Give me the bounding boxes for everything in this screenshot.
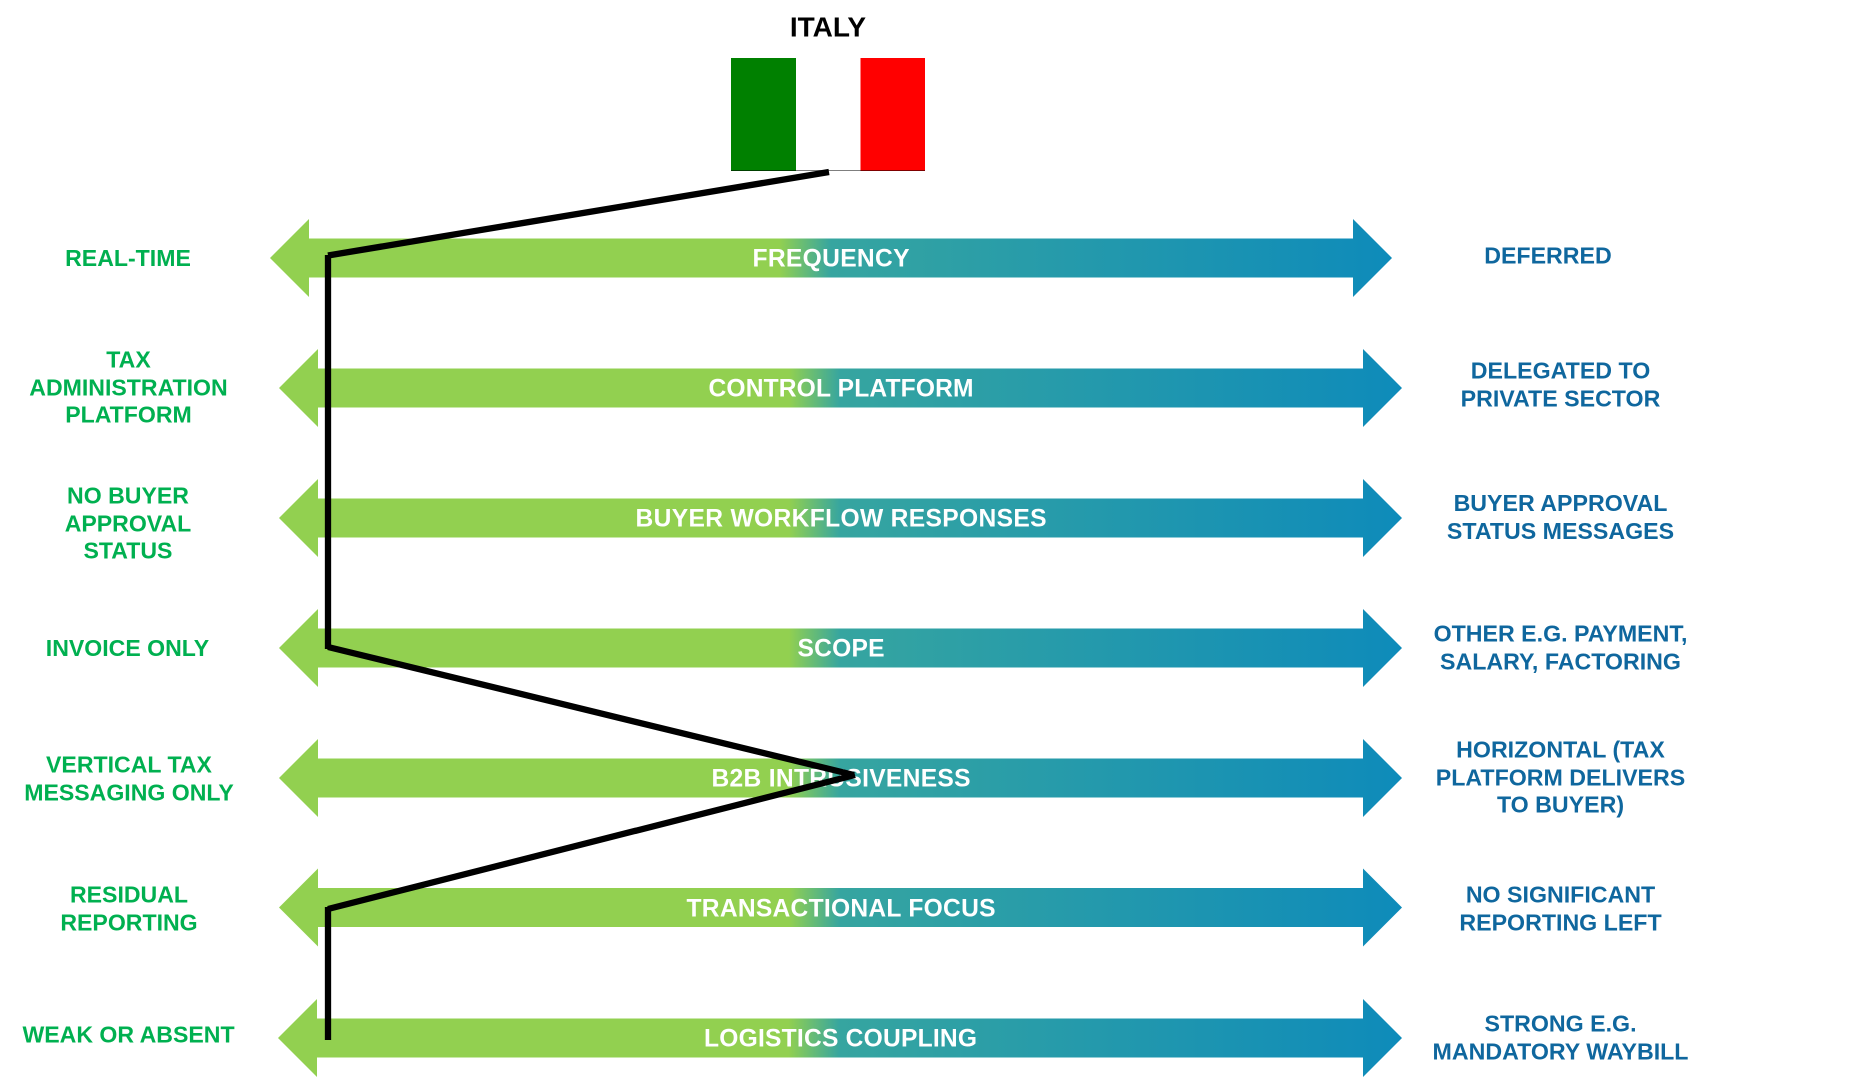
label: delegated to private sector: DELEGATED TO [1471,358,1650,384]
row: logistics coupling [22,999,1688,1077]
row: frequency [65,219,1612,297]
label: buyer approval status messages: STATUS MESSAGES [1447,518,1674,544]
heading: buyer workflow responses: BUYER WORKFLOW RESPONSES [636,506,1046,533]
title: Italy: ITALY [790,12,866,42]
label: tax administration platform: ADMINISTRATION [29,375,228,401]
heading: frequency: FREQUENCY [752,246,910,273]
label: no buyer approval status: NO BUYER [67,482,189,508]
label: horizontal: PLATFORM DELIVERS [1436,764,1685,790]
label: vertical tax messaging only: MESSAGING ONLY [24,780,234,806]
label: no significant reporting left: NO SIGNIFICANT [1466,882,1655,908]
heading: control platform: CONTROL PLATFORM [708,376,974,403]
label: horizontal: TO BUYER) [1497,792,1624,818]
label: tax administration platform: TAX [106,347,151,373]
label: strong e.g. mandatory waybill: STRONG E.G. [1484,1011,1637,1037]
row: transactional focus [60,868,1662,946]
arrow: control platform scale [279,349,1402,427]
label: other e.g. payment, salary, factoring: SALARY, FACTORING [1440,648,1681,674]
label: vertical tax messaging only: VERTICAL TAX [46,752,212,778]
arrow: frequency scale [270,219,1392,297]
heading: b2b intrusiveness: B2B INTRUSIVENESS [712,766,970,793]
arrow: buyer workflow scale [279,479,1402,557]
label: residual reporting: REPORTING [60,910,198,936]
label: residual reporting: RESIDUAL [70,882,188,908]
label: no buyer approval status: STATUS [84,538,172,564]
label: horizontal: HORIZONTAL (TAX [1456,737,1665,763]
arrow: logistics coupling scale [278,999,1402,1077]
label: other e.g. payment, salary, factoring: OTHER E.G. PAYMENT, [1434,621,1687,647]
label: weak or absent: WEAK OR ABSENT [22,1022,235,1048]
label: delegated to private sector: PRIVATE SECTOR [1461,386,1661,412]
heading: transactional focus: TRANSACTIONAL FOCUS [686,895,996,922]
row: control platform [29,347,1661,428]
label: no buyer approval status: APPROVAL [65,510,191,536]
label: invoice only: INVOICE ONLY [46,635,210,661]
row: scope [46,609,1687,687]
arrow: scope scale [279,609,1402,687]
label: deferred: DEFERRED [1484,242,1612,268]
label: no significant reporting left: REPORTING LEFT [1459,910,1662,936]
row: buyer workflow responses [65,479,1674,564]
label: strong e.g. mandatory waybill: MANDATORY WAYBILL [1433,1038,1688,1064]
row: b2b intrusiveness [24,737,1685,818]
arrow: b2b intrusiveness scale [279,739,1402,817]
arrow: transactional focus scale [279,868,1402,946]
label: buyer approval status messages: BUYER APPROVAL [1454,490,1667,516]
label: tax administration platform: PLATFORM [65,402,192,428]
label: real-time: REAL-TIME [65,245,191,271]
icon: Italian flag [731,58,925,171]
heading: logistics coupling: LOGISTICS COUPLING [704,1026,977,1052]
line: Italy position profile [328,172,855,1040]
heading: scope: SCOPE [798,636,884,663]
